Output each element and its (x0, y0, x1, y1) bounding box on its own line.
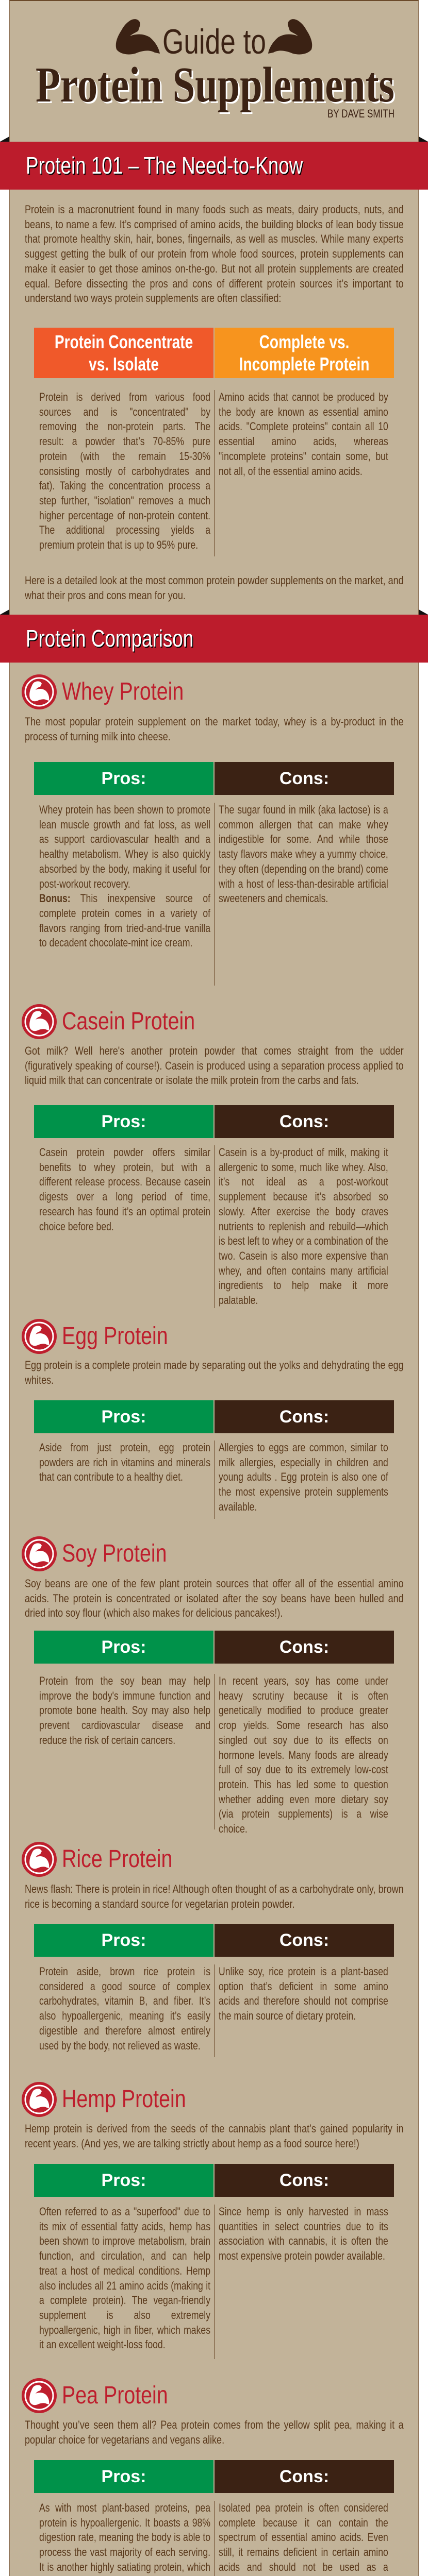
pros cons header: Cons: (279, 1112, 329, 1131)
heading: soy: Soy Protein (62, 1540, 167, 1567)
pros cons columns: Aside from just protein, egg protein powders are rich in vitamins and minerals that can contribute to a healthy diet. (39, 1441, 210, 1483)
pros cons header: Pros: (102, 2467, 146, 2486)
byline: BY DAVE SMITH (327, 107, 394, 120)
icon: soy (22, 1536, 57, 1571)
icon: hemp (22, 2082, 57, 2117)
pros cons header: Cons: (279, 1407, 329, 1427)
pros cons header: Cons: (279, 1637, 329, 1657)
text: hemp description: Hemp protein is derived from the seeds of the cannabis plant that’s gained popularity in recent years. (And yes, we are talking strictly about hemp as a food source here!) (25, 2122, 404, 2150)
text: egg description: Egg protein is a complete protein made by separating out the yolks and dehydrating the egg whites. (25, 1359, 404, 1386)
pros cons columns: Casein is a by-product of milk, making it allergenic to some, much like whey. Also, it’s not ideal as a post-workout supplement because it’s absorbed so slowly. After exercise the body craves nutrients to replenish and rebuild—which is best left to whey or a combination of the two. Casein is also more expensive than whey, and often contains many artificial ingredients to help make it more palatable. (219, 1146, 388, 1307)
pros cons header (34, 1105, 394, 1138)
heading: pea: Pea Protein (62, 2382, 168, 2409)
pros cons columns (39, 2501, 388, 2576)
section header: Protein 101: Protein 101 – The Need-to-Know (26, 152, 303, 179)
classification text columns (39, 390, 388, 556)
pros cons columns (39, 803, 388, 986)
pros cons columns: In recent years, soy has come under heavy scrutiny because it is often genetically modified to produce greater crop yields. Some research has also singled out soy due to its effects on hormone levels. Many foods are already full of soy due to its extremely low-cost protein. This has led some to question whether adding even more dietary soy (via protein supplements) is a wise choice. (219, 1674, 388, 1835)
text: pea description: Thought you’ve seen them all? Pea protein comes from the yellow split pea, making it a popular choice for vegetarians and vegans alike. (25, 2418, 404, 2446)
icon: left flexed arm (116, 19, 160, 55)
icon: pea (22, 2378, 57, 2413)
pros cons header: Cons: (279, 2467, 329, 2486)
pros cons columns: The sugar found in milk (aka lactose) is a common allergen that can make whey indigestible for some. And while those tasty flavors make whey a yummy choice, they often (depending on the brand) come with a host of less-than-desirable artificial sweeteners and chemicals. (219, 803, 388, 905)
icon: right flexed arm (268, 19, 312, 55)
pros cons columns: Whey protein has been shown to promote lean muscle growth and fat loss, as well as support cardiovascular health and a healthy metabolism. Whey is also quickly absorbed by the body, making it useful for post-workout recovery. (39, 803, 210, 890)
pros cons header: Pros: (102, 769, 146, 788)
text: rice description: News flash: There is protein in rice! Although often thought of as a carbohydrate only, brown rice is becoming a standard source for vegetarian protein powder. (25, 1883, 404, 1910)
heading: Guide to: Guide to (162, 22, 266, 61)
pros cons header (34, 762, 394, 795)
pros cons header (34, 1400, 394, 1433)
pros cons columns: Bonus: This inexpensive source of complete protein comes in a variety of flavors ranging from tried-and-true vanilla to decadent chocolate-mint ice cream. (39, 892, 210, 949)
pros cons columns (39, 1145, 388, 1308)
pros cons header (34, 2164, 394, 2197)
text: casein description: Got milk? Well here's another protein powder that comes straight from the udder (figuratively speaking of course!). Casein is produced using a separation process applied to liquid milk that can concentrate or isolate the milk protein from the carbs and fats. (25, 1044, 404, 1087)
classification header boxes: Protein Concentrate (55, 331, 193, 352)
pros cons columns (39, 2205, 388, 2359)
section header: Protein Comparison (0, 615, 428, 663)
panel: hemp protein (22, 2082, 404, 2359)
panel: whey protein (22, 674, 404, 986)
pros cons header: Pros: (102, 1930, 146, 1950)
pros cons columns (39, 1440, 388, 1519)
heading: whey: Whey Protein (62, 678, 184, 705)
icon: casein (22, 1004, 57, 1039)
panel: soy protein (22, 1536, 404, 1835)
text: soy description: Soy beans are one of the few plant protein sources that offer all of the essential amino acids. The protein is concentrated or isolated after the soy beans have been hulled and dried into soy flour (which also makes for delicious pancakes!). (25, 1577, 404, 1619)
pros cons header: Pros: (102, 1112, 146, 1131)
pros cons columns: Protein aside, brown rice protein is considered a good source of complex carbohydrates, vitamin B, and fiber. It’s also hypoallergenic, meaning it’s easily digestible and therefore almost entirely used by the body, not relieved as waste. (39, 1965, 210, 2052)
classification header boxes: vs. Isolate (89, 353, 159, 375)
classification text columns: Amino acids that cannot be produced by the body are known as essential amino acids. "Complete proteins" contain all 10 essential amino acids, whereas "incomplete proteins" contain some, but not all, of the essential amino acids. (219, 391, 388, 478)
title block (36, 19, 396, 120)
pros cons columns: Since hemp is only harvested in mass quantities in select countries due to its association with cannabis, it is often the most expensive protein powder available. (219, 2205, 388, 2262)
pros cons header: Cons: (279, 1930, 329, 1950)
classification header boxes: Incomplete Protein (239, 353, 369, 375)
text block: intro 2: Here is a detailed look at the most common protein powder supplements on the market, and what their pros and cons mean for you. (25, 574, 404, 602)
panel: casein protein (22, 1004, 404, 1308)
heading: egg: Egg Protein (62, 1323, 168, 1350)
pros cons header: Pros: (102, 1407, 146, 1427)
classification header boxes (34, 328, 394, 378)
panel: rice protein (22, 1842, 404, 2057)
classification text columns: Protein is derived from various food sources and is "concentrated" by removing the non-protein parts. The result: a powder that’s 70-85% pure protein (with the remain 15-30% consisting mostly of carbohydrates and fat). Taking the concentration process a step further, "isolation" removes a much higher percentage of non-protein content. The additional processing yields a premium protein that is up to 95% pure. (39, 391, 210, 551)
pros cons columns (39, 1674, 388, 1835)
pros cons header: Cons: (279, 769, 329, 788)
pros cons header: Pros: (102, 2171, 146, 2190)
heading: rice: Rice Protein (62, 1845, 172, 1873)
pros cons columns: Unlike soy, rice protein is a plant-based option that’s deficient in some amino acids and therefore should not comprise the main source of dietary protein. (219, 1965, 388, 2022)
icon: rice (22, 1842, 57, 1877)
classification header boxes: Complete vs. (259, 331, 349, 352)
pros cons columns: Allergies to eggs are common, similar to milk allergies, especially in children and young adults . Egg protein is also one of the most expensive protein supplements available. (219, 1441, 388, 1513)
panel: egg protein (22, 1319, 404, 1519)
text block: intro: Protein is a macronutrient found in many foods such as meats, dairy products, nuts, and beans, to name a few. It’s comprised of amino acids, the building blocks of lean body tissue that promote healthy skin, hair, bones, fingernails, as well as muscles. While many experts suggest getting the bulk of our protein from whole food sources, protein supplements can make it easier to get those aminos on-the-go. But not all protein supplements are created equal. Before dissecting the pros and cons of different protein sources it’s important to understand two ways protein supplements are often classified: (25, 203, 404, 304)
icon: egg (22, 1319, 57, 1354)
text: whey description: The most popular protein supplement on the market today, whey is a by-product in the process of turning milk into cheese. (25, 715, 404, 743)
pros cons columns: Protein from the soy bean may help improve the body's immune function and promote bone health. Soy may also help prevent cardiovascular disease and reduce the risk of certain cancers. (39, 1674, 210, 1747)
pros cons header (34, 2460, 394, 2493)
pros cons header (34, 1924, 394, 1957)
panel: pea protein (22, 2378, 404, 2576)
section header: Protein 101 (0, 142, 428, 190)
pros cons header: Pros: (102, 1637, 146, 1657)
heading: hemp: Hemp Protein (62, 2086, 186, 2113)
pros cons columns (39, 1964, 388, 2057)
icon: whey (22, 674, 57, 709)
pros cons header: Cons: (279, 2171, 329, 2190)
pros cons header (34, 1631, 394, 1664)
section header: Protein Comparison: Protein Comparison (26, 625, 193, 652)
pros cons columns: Often referred to as a "superfood" due to its mix of essential fatty acids, hemp has been shown to improve metabolism, brain function, and circulation, and can help treat a host of medical conditions. Hemp also includes all 21 amino acids (making it a complete protein). The vegan-friendly supplement is also extremely hypoallergenic, high in fiber, which makes it an excellent weight-loss food. (39, 2205, 210, 2351)
heading: casein: Casein Protein (62, 1008, 195, 1035)
pros cons columns: Casein protein powder offers similar benefits to whey protein, but with a different release process. Because casein digests over a long period of time, research has found it’s an optimal protein choice before bed. (39, 1146, 210, 1233)
